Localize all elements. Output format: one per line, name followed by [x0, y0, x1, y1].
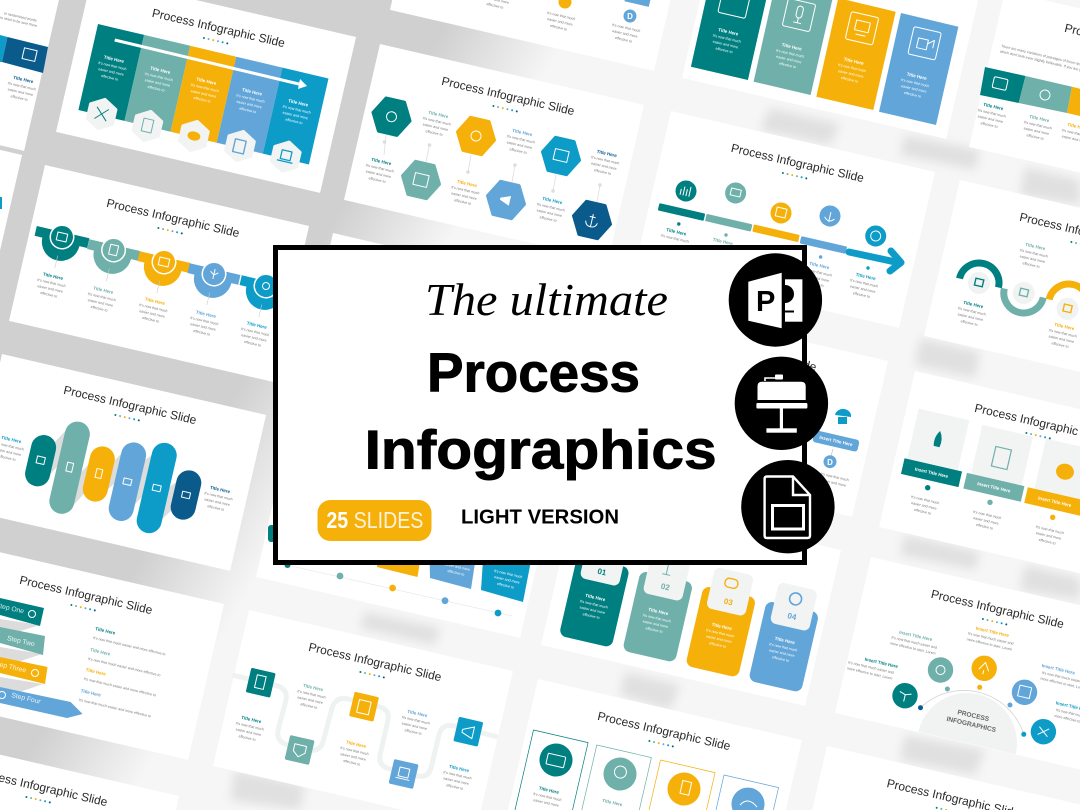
semicircle text blocks: more effective to start. Lorem [890, 641, 936, 656]
step text blocks: easier and more [190, 322, 216, 332]
hexagon text blocks: It's now that much [506, 134, 535, 145]
panel: bar timeline with arrow slide [635, 111, 935, 328]
column text blocks: It's now that much [190, 83, 219, 93]
panel: far-left top slide [0, 0, 60, 151]
path text blocks: easier and more [401, 721, 428, 731]
panel: far-left top slide: It's now that much [7, 81, 36, 92]
panel: coloured cards with dots slide: It's now that much [494, 569, 523, 579]
step descriptions: It's now that much easier and more effective to [83, 677, 156, 697]
arc text blocks: easier and more [957, 312, 984, 322]
card text blocks: effective to [772, 655, 789, 663]
panel: coloured cards with dots slide: easier and more [444, 562, 470, 572]
hexagon text blocks [363, 109, 621, 224]
badge: 25 slides: 25 SLIDES [326, 507, 423, 533]
panel: top-right strip slide: easier and more [1023, 126, 1050, 136]
timeline text blocks: Title Here [855, 272, 877, 281]
icon: PowerPoint: P [756, 286, 775, 318]
hexagon text blocks: It's now that much [365, 163, 394, 174]
panel: insert title tiles slide [879, 371, 1080, 588]
number tabs [579, 537, 818, 632]
semicircle text blocks: more effective to start. Lorem [846, 666, 893, 681]
panel: slide behind keynote icon: Insert Title Here [819, 435, 854, 447]
panel: far-left top slide: easier and more [7, 87, 34, 97]
pill text blocks: effective to [207, 504, 225, 512]
card text blocks: easier and more [579, 605, 606, 615]
card text blocks: It's now that much [901, 78, 930, 88]
circle icons [890, 653, 1059, 747]
path text blocks: easier and more [340, 752, 366, 762]
outlined card text: Title Here [538, 786, 560, 795]
arc segments with icons [957, 259, 1080, 324]
slide title: Process Infographic Slide [930, 587, 1066, 631]
hexagon text blocks: effective to [425, 129, 443, 137]
timeline circle icons [673, 178, 888, 249]
card text blocks: easier and more [642, 619, 669, 629]
path text blocks: It's now that much [297, 689, 326, 700]
step bars [0, 598, 83, 718]
outlined card text [532, 785, 623, 808]
timeline bars [658, 203, 847, 254]
card text blocks: It's now that much [712, 33, 741, 44]
arc text blocks: It's now that much [957, 306, 986, 317]
number tabs: 04 [787, 611, 798, 622]
arc text blocks: Title Here [1054, 322, 1075, 331]
step text blocks [34, 271, 271, 349]
hexagon text blocks: easier and more [451, 191, 477, 201]
arc text blocks: Title Here [963, 300, 984, 309]
heading: The ultimate: The ultimate [425, 274, 668, 325]
panel: top centre slide with lettered steps: D [627, 12, 633, 21]
path text blocks: easier and more [235, 727, 262, 737]
hexagon text blocks: effective to [539, 215, 557, 223]
panel: top-right strip slide: It's now that much [977, 108, 1006, 119]
card text blocks: effective to [841, 76, 858, 84]
card text blocks: It's now that much [776, 48, 805, 59]
arc text blocks: It's now that much [1019, 248, 1048, 259]
circle icons [536, 740, 765, 810]
arc text blocks [955, 241, 1079, 350]
path text blocks: It's now that much [340, 746, 369, 756]
number tabs: 01 [597, 567, 608, 578]
card text blocks: It's now that much [706, 628, 735, 639]
arc text blocks: effective to [1051, 341, 1069, 349]
tiles with icons and banners [901, 409, 1080, 520]
step descriptions: It's now that much easier and more effective to [88, 657, 161, 677]
tile descriptions: easier and more [973, 516, 999, 526]
path text blocks [233, 682, 474, 792]
timeline text blocks: easier and more [850, 284, 876, 294]
step text blocks: effective to [142, 316, 160, 324]
column text blocks: easier and more [144, 78, 171, 88]
hexagons with icons [369, 96, 614, 241]
panel: wave timeline slide [9, 165, 309, 382]
step text blocks: It's now that much [37, 278, 66, 288]
column text blocks: It's now that much [144, 72, 173, 82]
card text blocks: Title Here [843, 57, 865, 66]
panel: square icons path slide [213, 610, 513, 810]
card text blocks: Title Here [774, 636, 796, 645]
pill connector shadows [45, 424, 185, 525]
step text blocks: effective to [90, 305, 108, 313]
column text blocks: It's now that much [236, 93, 265, 104]
slide title: Process Infographic Slide [307, 640, 443, 684]
hexagon text blocks: easier and more [591, 161, 617, 171]
path text blocks: It's now that much [401, 715, 430, 726]
timeline text blocks: Title Here [809, 261, 830, 270]
slide title: Process Infographic Slide [596, 709, 732, 753]
step text blocks: effective to [244, 340, 261, 348]
step bars: Step Four [11, 692, 42, 706]
hexagon text blocks: effective to [454, 198, 472, 206]
panel: top-right strip slide: effective to [1026, 133, 1044, 141]
path text blocks: easier and more [443, 776, 469, 786]
arc text blocks: effective to [1022, 261, 1040, 269]
panel: slide behind keynote icon: Process Infographic Slide [682, 330, 818, 374]
card text blocks: It's now that much [838, 63, 867, 73]
panel: coloured cards with dots slide: effective to [447, 569, 465, 577]
tall coloured cards [691, 0, 958, 125]
semicircle dome with label: PROCESS [957, 709, 990, 723]
semicircle text blocks: It's now that much easier and [891, 635, 937, 650]
icon: Google Slides [741, 460, 835, 553]
panel: top-right strip slide: Title Here [983, 102, 1004, 111]
panel: coloured cards with dots slide: effective to [497, 582, 514, 590]
card text blocks: easier and more [706, 634, 732, 644]
timeline text blocks: effective to [806, 280, 824, 288]
pills with icons [23, 419, 204, 536]
card text blocks [710, 26, 931, 100]
column text blocks: Title Here [288, 98, 309, 108]
panel: slide behind keynote icon: D [827, 458, 833, 467]
hexagon text blocks: It's now that much [536, 202, 565, 213]
panel: top-right strip slide: easier and more [977, 114, 1004, 124]
icon: Keynote [735, 357, 828, 450]
card text blocks: effective to [904, 91, 921, 99]
numbered cards [559, 556, 819, 693]
tile descriptions: effective to [914, 508, 931, 516]
column text blocks: effective to [193, 96, 211, 104]
tile descriptions: It's now that much [973, 510, 1002, 520]
step text blocks: Title Here [144, 297, 166, 306]
hexagon text blocks: easier and more [506, 140, 533, 150]
timeline text blocks: It's now that much [850, 278, 879, 289]
card text blocks: Title Here [906, 72, 928, 81]
panel: bottom-right slide [812, 746, 1080, 810]
card text blocks: It's now that much [579, 599, 608, 610]
slide title: Process Infographic Slide [151, 6, 287, 50]
hexagon text blocks: Title Here [542, 196, 563, 205]
outlined cards [515, 730, 779, 810]
column text blocks: easier and more [190, 89, 217, 99]
tile descriptions: easier and more [1035, 531, 1062, 541]
slide title: Process Infographic Slide [18, 573, 154, 617]
card text blocks: effective to [645, 626, 663, 634]
timeline text blocks: effective to [853, 291, 870, 299]
arrow: white timeline arrow [115, 40, 307, 89]
label: light version: LIGHT VERSION [461, 505, 619, 528]
card text blocks: It's now that much [769, 642, 798, 653]
arc text blocks: effective to [960, 319, 978, 327]
panel: outlined cards with circle icons slide [508, 679, 802, 810]
card text blocks: easier and more [769, 648, 795, 658]
pill text blocks: Title Here [1, 435, 22, 444]
card text blocks [577, 592, 799, 664]
step text blocks: effective to [193, 329, 211, 337]
card text blocks: Title Here [781, 42, 803, 52]
path text blocks: It's now that much [443, 770, 472, 781]
path text blocks: Title Here [449, 764, 470, 773]
column text blocks: effective to [285, 117, 303, 125]
path text blocks: effective to [404, 728, 422, 736]
column text blocks: It's now that much [98, 61, 127, 71]
step text blocks: It's now that much [241, 327, 270, 337]
panel: central title box [276, 248, 804, 562]
timeline text blocks: It's now that much [660, 233, 689, 244]
panel: top-right strip slide: effective to [980, 121, 998, 129]
arc text blocks: easier and more [1048, 334, 1075, 344]
arc text blocks: easier and more [1019, 254, 1046, 264]
column text blocks: Title Here [150, 66, 171, 75]
tile descriptions [908, 495, 1064, 547]
hexagon text blocks: Title Here [371, 157, 392, 166]
column text blocks: It's now that much [282, 104, 311, 115]
panel: far-left top slide: effective to [10, 94, 28, 102]
arrow: timeline end arrow [849, 251, 901, 271]
card text blocks: easier and more [712, 40, 739, 49]
icon: PowerPoint [729, 253, 822, 347]
step descriptions: Title Here [85, 667, 107, 677]
hexagon text blocks: It's now that much [451, 185, 480, 196]
coloured columns [78, 24, 329, 164]
card text blocks: Title Here [648, 607, 669, 616]
tile descriptions: effective to [1038, 538, 1056, 546]
step descriptions: Title Here [80, 688, 102, 698]
panel: numbered cards 01 to 04 slide [541, 489, 841, 706]
hexagon text blocks: It's now that much [591, 155, 620, 166]
panel: top-right strip slide [969, 0, 1080, 208]
panel: top-right strip slide: It's now that much [1023, 120, 1052, 131]
panel: arc wave slide [924, 180, 1080, 397]
step text blocks: easier and more [241, 333, 267, 343]
step text blocks: easier and more [139, 309, 165, 319]
path text blocks: easier and more [297, 695, 323, 705]
pill text blocks: easier and more [204, 497, 230, 507]
card text blocks: Title Here [718, 27, 739, 37]
hexagon text blocks: effective to [594, 168, 611, 176]
path text blocks: effective to [238, 734, 256, 742]
panel: top centre slide with lettered steps: effective to [550, 24, 567, 32]
card text blocks: easier and more [838, 69, 864, 79]
panel: top centre slide with lettered steps: easier and more [547, 17, 573, 27]
card text blocks: effective to [709, 641, 726, 649]
number tabs: 03 [723, 597, 734, 608]
hexagon text blocks: effective to [368, 176, 386, 184]
number tabs: 02 [660, 582, 671, 593]
step descriptions: It's now that much easier and more effective to [93, 636, 166, 656]
heading: Infographics: Infographics [365, 418, 717, 480]
arc text blocks: It's now that much [1048, 328, 1077, 339]
path text blocks: Title Here [241, 715, 262, 724]
panel: coloured cards with dots slide: easier and more [494, 575, 520, 585]
semicircle text blocks: Insert Title Here [864, 657, 899, 669]
heading: Process: Process [427, 342, 640, 404]
hexagon text blocks: easier and more [422, 122, 449, 132]
tile descriptions: effective to [976, 523, 993, 531]
hexagon text blocks: Title Here [596, 149, 618, 158]
card text blocks: Title Here [585, 593, 606, 602]
step text blocks: effective to [40, 291, 58, 299]
column text blocks: effective to [147, 85, 165, 93]
panel: slide with five coloured columns and arrow [56, 0, 356, 193]
step text blocks: Title Here [195, 310, 217, 319]
panel: far-left top slide: Title Here [13, 75, 34, 84]
hexagon text blocks: Title Here [428, 110, 449, 119]
hexagon text blocks: easier and more [536, 208, 563, 218]
slide title: Process Infographic Slide [62, 383, 198, 427]
column text blocks: Title Here [242, 87, 263, 97]
card text blocks: effective to [779, 61, 796, 69]
pill text blocks [0, 434, 235, 513]
timeline text blocks: easier and more [803, 273, 830, 283]
column text blocks: easier and more [282, 111, 308, 120]
step descriptions: Title Here [95, 626, 116, 636]
panel: slide behind keynote icon: It's now that much [820, 472, 849, 482]
panel: top centre slide with lettered steps [390, 0, 690, 71]
panel: hexagon process slide [344, 44, 644, 261]
hexagon text blocks: easier and more [365, 169, 392, 179]
column text blocks [95, 54, 313, 127]
column text blocks: Title Here [103, 55, 125, 64]
timeline text blocks: Title Here [712, 237, 734, 246]
panel: bottom-left slide [0, 735, 179, 810]
column text blocks: effective to [239, 106, 257, 114]
hexagon text blocks: Title Here [456, 179, 478, 188]
panel: slide behind keynote icon: easier and more [820, 478, 846, 488]
panel: far-left second slide [0, 94, 22, 311]
column text blocks: easier and more [236, 100, 262, 109]
semicircle text blocks: Insert Title Here [899, 630, 933, 642]
panel: tilted pills slide [0, 354, 266, 571]
step text blocks: easier and more [87, 298, 114, 308]
step text blocks: easier and more [37, 284, 63, 294]
semicircle text blocks: It's now that much easier and [848, 660, 894, 675]
path text blocks: effective to [300, 702, 318, 710]
panel: top centre slide with lettered steps: effective to [486, 2, 504, 10]
square icons [246, 668, 483, 789]
arc text blocks: Title Here [1025, 242, 1046, 251]
tile descriptions: easier and more [911, 501, 937, 511]
path text blocks: effective to [343, 759, 361, 767]
hexagon text blocks: It's now that much [422, 116, 451, 127]
path text blocks: Title Here [407, 709, 428, 718]
path text blocks: Title Here [303, 683, 324, 692]
tile descriptions: It's now that much [1035, 525, 1064, 535]
tiles with icons and banners: Insert Title Here [914, 466, 949, 479]
column text blocks: effective to [101, 74, 119, 82]
connector lines and dots [383, 135, 602, 202]
panel: slide behind keynote icon [588, 300, 888, 517]
step text blocks: It's now that much [139, 303, 168, 313]
semicircle text blocks: Insert Title Here [975, 626, 1010, 638]
card text blocks: It's now that much [642, 613, 671, 624]
column text blocks: Title Here [196, 77, 217, 86]
pill text blocks: It's now that much [204, 491, 233, 502]
arc with step dots [918, 685, 1026, 737]
panel: top centre slide with lettered steps: It's now that much [612, 23, 641, 33]
card text blocks: easier and more [901, 84, 927, 94]
tile descriptions: It's now that much [911, 495, 940, 505]
card text blocks: easier and more [776, 55, 802, 64]
panel: coloured cards with dots slide [256, 421, 556, 638]
path text blocks: Title Here [346, 740, 367, 749]
step descriptions: Title Here [90, 647, 111, 657]
step text blocks: Title Here [246, 321, 268, 330]
column text blocks: easier and more [98, 67, 124, 77]
panel: semicircle process slide [835, 557, 1080, 774]
semicircle text blocks: It's now that much easier and [968, 631, 1014, 646]
step bars: Step Two [6, 635, 36, 648]
slide title: Process Infographic Slide [105, 196, 241, 240]
timeline text blocks: Title Here [666, 227, 687, 237]
badge: 25 slides [318, 500, 432, 541]
step descriptions: It's now that much easier and more effective to [78, 698, 151, 718]
wave steps with circle icons [28, 219, 294, 323]
panel: four tall cards slide [682, 0, 982, 139]
panel: centre slide behind box [297, 233, 597, 450]
panel: top centre slide with lettered steps: easier and more [612, 29, 638, 39]
card text blocks: Title Here [711, 622, 733, 631]
hexagon text blocks: Title Here [512, 128, 533, 137]
winding path [232, 675, 498, 776]
step descriptions [78, 626, 168, 718]
outlined card text: easier and more [533, 798, 559, 808]
tiles with icons and banners: Insert Title Here [1038, 495, 1072, 508]
semicircle dome with label [918, 683, 1027, 754]
path text blocks: It's now that much [235, 721, 264, 732]
panel: top centre slide with lettered steps: effective to [615, 36, 632, 44]
pill text blocks: Title Here [210, 485, 231, 494]
panel: top centre slide with lettered steps: It's now that much [547, 11, 576, 21]
outlined card text: It's now that much [533, 792, 562, 802]
step text blocks: Title Here [43, 272, 64, 281]
outlined card text: Title Here [602, 798, 623, 807]
timeline text blocks: It's now that much [803, 267, 832, 278]
panel: top-right strip slide: Title Here [1029, 114, 1050, 123]
card text blocks: effective to [582, 612, 600, 620]
step text blocks: It's now that much [190, 316, 219, 326]
slide title: Process Infographic Slide [730, 141, 866, 185]
step text blocks: It's now that much [87, 292, 116, 302]
panel: far-left top slide: or randomised words [3, 11, 37, 23]
hexagon text blocks: effective to [509, 147, 527, 155]
panel: step bars slide [0, 543, 224, 760]
path text blocks: effective to [446, 783, 464, 791]
semicircle text blocks: more effective to start. Lorem [966, 637, 1013, 652]
timeline text blocks [660, 226, 880, 300]
semicircle text blocks [846, 624, 1080, 728]
card text blocks: effective to [715, 46, 733, 54]
card icons [718, 0, 941, 60]
step text blocks: Title Here [93, 286, 114, 295]
slide title: Process Infographic Slide [440, 74, 576, 118]
semicircle text blocks: Insert Title Here [1041, 663, 1076, 676]
tiles with icons and banners: Insert Title Here [977, 481, 1011, 494]
semicircle dome with label: INFOGRAPHICS [946, 716, 997, 734]
hexagon icons [86, 96, 302, 174]
